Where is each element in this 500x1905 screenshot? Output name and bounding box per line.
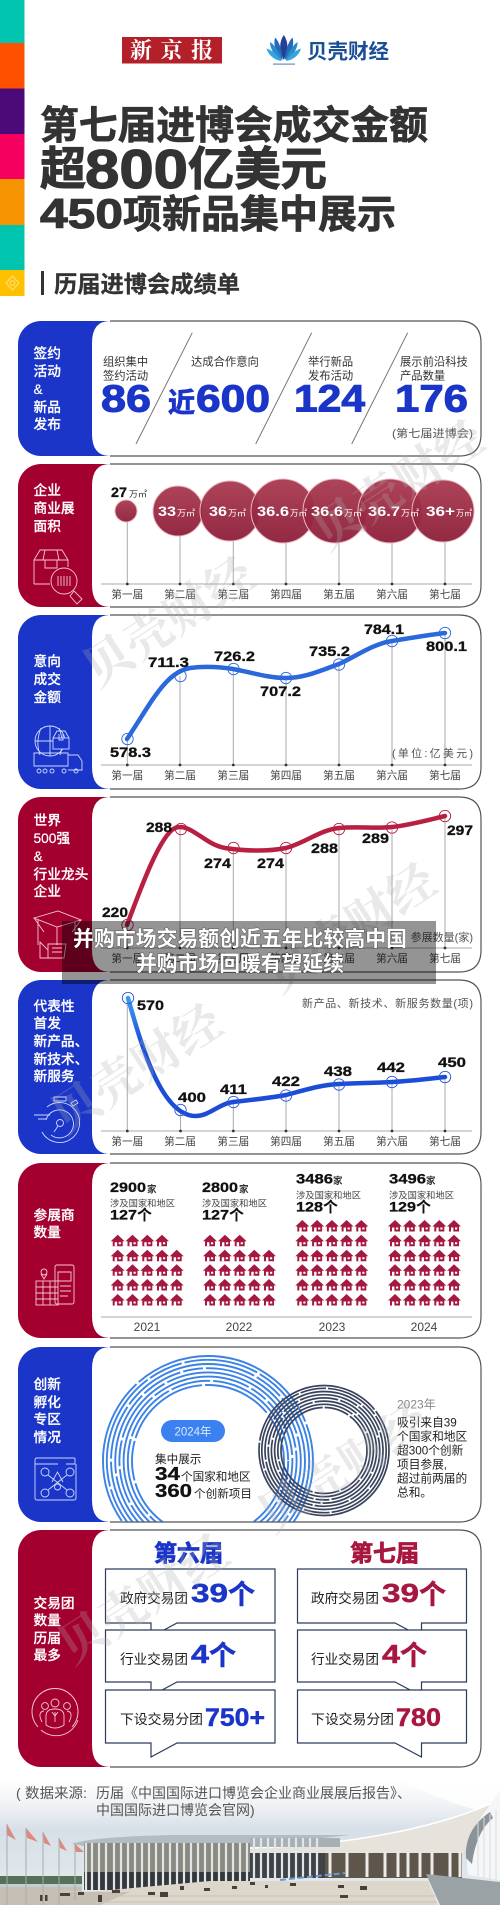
panel: intended turnover: 意向 bbox=[34, 653, 61, 669]
panel: signing activities: (第七届进博会) bbox=[392, 426, 473, 440]
line chart: fortune 500: 288 bbox=[311, 840, 338, 856]
line chart: turnover bbox=[101, 621, 473, 782]
callout: 2023 bbox=[397, 1398, 467, 1500]
icon: network window bbox=[35, 1458, 76, 1500]
exhibitor group: 2023: 2023 bbox=[319, 1320, 346, 1334]
watermark 4: 贝壳财经 bbox=[35, 983, 235, 1147]
area bubbles: 万㎡ bbox=[456, 508, 472, 518]
line chart: new products: 422 bbox=[272, 1073, 300, 1089]
exhibitor group: 2021: 2021 bbox=[134, 1320, 161, 1334]
line chart: fortune 500: 第四届 bbox=[270, 952, 302, 965]
watermark 5: 贝壳财经 bbox=[242, 1382, 442, 1546]
callout: 2024: 集中展示 bbox=[155, 1452, 201, 1466]
watermark 3: 贝壳财经 bbox=[249, 842, 449, 1006]
exhibitor group: 2023: 3486 bbox=[296, 1170, 333, 1186]
panel: exhibition area bbox=[18, 464, 481, 607]
line chart: turnover: 第二届 bbox=[164, 769, 196, 782]
panel: new products: 首发 bbox=[34, 1015, 61, 1031]
title: 450 bbox=[40, 190, 123, 237]
exhibitor group: 2021: 涉及国家和地区 bbox=[110, 1198, 175, 1208]
panel: signing activities: 展示前沿科技 bbox=[400, 354, 468, 368]
logo: 新京报: 新京报 bbox=[130, 34, 213, 65]
exhibitor group: 2022: 个 bbox=[229, 1207, 244, 1224]
callout: 2023: 超300个创新 bbox=[397, 1444, 464, 1458]
area bubbles: 万㎡ bbox=[344, 508, 363, 518]
callout: 2024: 360 bbox=[155, 1481, 192, 1501]
title: 亿美元 bbox=[188, 143, 327, 195]
panel: new products: 新技术、 bbox=[34, 1051, 88, 1067]
exhibitor group: 2021: 2900 bbox=[110, 1179, 146, 1195]
heading: seventh: 第七届 bbox=[350, 1540, 419, 1566]
line chart: fortune 500: 第七届 bbox=[429, 952, 461, 965]
logo: 贝壳财经: 贝壳财经 bbox=[307, 40, 389, 63]
exhibitor group: 2023: 涉及国家和地区 bbox=[296, 1190, 361, 1200]
line chart: new products: 442 bbox=[377, 1059, 405, 1075]
exhibitor group: 2023: 家 bbox=[333, 1175, 343, 1187]
callout: 2023: 总和。 bbox=[397, 1486, 432, 1500]
exhibitor group: 2022: 涉及国家和地区 bbox=[202, 1198, 267, 1208]
exhibitor group: 2023: 个 bbox=[323, 1199, 338, 1216]
callout: 2023: 吸引来自39 bbox=[397, 1416, 457, 1430]
watermark 2: 贝壳财经 bbox=[297, 399, 497, 563]
section heading: 历届进博会成绩单 bbox=[54, 271, 240, 297]
exhibitor group: 2024: 2024 bbox=[411, 1320, 438, 1334]
callouts: seventh expo bbox=[298, 1569, 466, 1757]
area bubbles: 36 bbox=[209, 503, 227, 519]
line chart: fortune 500: 第一届 bbox=[111, 952, 143, 965]
panel: signing activities: 签约 bbox=[34, 345, 61, 361]
title: 800 bbox=[85, 138, 188, 200]
exhibitor group: 2024: 家 bbox=[426, 1175, 436, 1187]
area bubbles: 万㎡ bbox=[129, 489, 148, 499]
panel: signing activities: 发布活动 bbox=[308, 368, 353, 382]
area bubbles: 36+ bbox=[426, 503, 455, 519]
area bubbles: 万㎡ bbox=[401, 508, 420, 518]
area bubbles bbox=[111, 479, 474, 584]
panel: trade delegations: 交易团 bbox=[34, 1595, 75, 1611]
panel: exhibitors: 参展商 bbox=[34, 1207, 75, 1223]
callouts: sixth expo: 个 bbox=[228, 1580, 255, 1610]
source note: 历届《中国国际进口博览会企业商业展展后报告》、 bbox=[96, 1785, 411, 1801]
exhibitor group: 2024: 3496 bbox=[389, 1170, 426, 1186]
line chart: fortune 500 bbox=[101, 810, 473, 965]
axis bbox=[101, 583, 472, 601]
panel: trade delegations: 数量 bbox=[34, 1613, 61, 1628]
panel: exhibitors bbox=[18, 1163, 481, 1338]
icon: box and thumb bbox=[34, 911, 81, 958]
panel: innovation zone: 专区 bbox=[34, 1412, 61, 1427]
panel: fortune 500: 500强 bbox=[34, 831, 70, 846]
axis: 第五届 bbox=[323, 588, 355, 601]
panel: trade delegations: 历届 bbox=[34, 1631, 61, 1646]
line chart: fortune 500: 第六届 bbox=[376, 952, 408, 965]
source note bbox=[16, 1785, 411, 1818]
source note: 中国国际进口博览会官网) bbox=[96, 1802, 255, 1818]
line chart: turnover: 784.1 bbox=[364, 621, 404, 637]
icon: people in circle bbox=[32, 1689, 78, 1736]
axis: 第一届 bbox=[111, 588, 143, 601]
line chart: new products: 第四届 bbox=[270, 1135, 302, 1148]
line chart: new products: 438 bbox=[324, 1063, 352, 1079]
panel: intended turnover: 成交 bbox=[34, 671, 61, 687]
line chart: turnover: (单位:亿美元) bbox=[392, 746, 473, 760]
callouts: sixth expo: 4 bbox=[191, 1639, 210, 1669]
callout: 2024: 个国家和地区 bbox=[181, 1470, 251, 1484]
chart: dark ring 2023 bbox=[259, 1386, 389, 1516]
callouts: seventh expo: 780 bbox=[396, 1704, 441, 1732]
callout: 2024: 个创新项目 bbox=[194, 1486, 252, 1500]
callout: 2023: 项目参展, bbox=[397, 1458, 447, 1472]
panel: signing activities: 产品数量 bbox=[400, 368, 445, 382]
area bubbles: 万㎡ bbox=[177, 508, 196, 518]
line chart: new products: 第二届 bbox=[164, 1135, 196, 1148]
panel: signing activities: 600 bbox=[196, 378, 270, 420]
panel: new products bbox=[18, 980, 481, 1154]
exhibitor group: 2021: 127 bbox=[110, 1206, 137, 1222]
callout: 2023: 2023年 bbox=[397, 1398, 436, 1412]
line chart: fortune 500: 第三届 bbox=[217, 952, 249, 965]
panel: exhibition area: 商业展 bbox=[34, 501, 75, 516]
axis: 第六届 bbox=[376, 588, 408, 601]
callouts: seventh expo: 下设交易分团 bbox=[311, 1711, 394, 1727]
callouts: seventh expo: 39 bbox=[382, 1578, 419, 1608]
callout: 2023: 超过前两届的 bbox=[397, 1472, 467, 1486]
area bubbles: 33 bbox=[158, 503, 176, 519]
line chart: fortune 500: 第二届 bbox=[164, 952, 196, 965]
source note: ( bbox=[16, 1785, 21, 1801]
panel: new products: 新产品、 bbox=[34, 1034, 88, 1049]
title: 第七届进博会成交金额 bbox=[40, 105, 428, 148]
area bubbles: 36.7 bbox=[368, 503, 400, 519]
panel: exhibition area: 面积 bbox=[34, 519, 61, 534]
banner overlay: 并购市场交易额创近五年比较高中国 bbox=[73, 927, 407, 951]
panel: signing activities: 近 bbox=[168, 388, 195, 418]
exhibitor group: 2022: 家 bbox=[239, 1184, 249, 1196]
line chart: turnover: 第五届 bbox=[323, 769, 355, 782]
line chart: new products: 411 bbox=[220, 1081, 247, 1097]
line chart: new products: 450 bbox=[438, 1054, 466, 1070]
line chart: turnover: 578.3 bbox=[110, 744, 151, 760]
axis: 第四届 bbox=[270, 588, 302, 601]
panel: signing activities: 124 bbox=[294, 378, 365, 420]
line chart: turnover: 第七届 bbox=[429, 769, 461, 782]
icon: stopwatch bbox=[34, 1097, 80, 1143]
panel: signing activities: & bbox=[34, 382, 43, 397]
axis: 第七届 bbox=[429, 588, 461, 601]
banner overlay bbox=[62, 921, 436, 984]
line chart: new products bbox=[101, 992, 473, 1148]
exhibitor group: 2021: 家 bbox=[147, 1184, 157, 1196]
line chart: new products: 第三届 bbox=[217, 1135, 249, 1148]
line chart: turnover: 第四届 bbox=[270, 769, 302, 782]
line chart: turnover: 第一届 bbox=[111, 769, 143, 782]
exhibitor group: 2022: 127 bbox=[202, 1206, 229, 1222]
watermark 6: 贝壳财经 bbox=[42, 1513, 242, 1677]
panel: innovation zone bbox=[18, 1346, 482, 1523]
panel: fortune 500: 世界 bbox=[34, 813, 61, 828]
callout: 2024: 2024年 bbox=[174, 1424, 212, 1438]
area bubbles: 万㎡ bbox=[228, 508, 247, 518]
panel: signing activities bbox=[18, 321, 481, 456]
area bubbles: 36.6 bbox=[311, 503, 343, 519]
area bubbles: 万㎡ bbox=[290, 508, 307, 518]
callouts: sixth expo: 政府交易团 bbox=[120, 1590, 188, 1606]
panel: signing activities: 活动 bbox=[34, 364, 61, 379]
panel: trade delegations: 最多 bbox=[34, 1647, 61, 1663]
line chart: fortune 500: 288 bbox=[146, 819, 172, 835]
left colour strip bbox=[0, 0, 24, 296]
line chart: fortune 500: 220 bbox=[102, 904, 128, 920]
panel: signing activities: 签约活动 bbox=[103, 368, 148, 382]
line chart: new products: 第七届 bbox=[429, 1135, 461, 1148]
exhibitor group: 2023 bbox=[295, 1170, 368, 1334]
callouts: sixth expo: 39 bbox=[191, 1578, 228, 1608]
area bubbles: 27 bbox=[111, 484, 127, 500]
exhibitor group: 2021: 个 bbox=[137, 1207, 152, 1224]
watermark 1: 贝壳财经 bbox=[67, 536, 267, 700]
callouts: sixth expo: 个 bbox=[209, 1641, 236, 1671]
panel: new products: 新服务 bbox=[34, 1069, 75, 1084]
line chart: turnover: 800.1 bbox=[426, 638, 467, 654]
line chart: fortune 500: 297 bbox=[447, 822, 473, 838]
source note: 数据来源: bbox=[25, 1785, 87, 1801]
panel: trade delegations bbox=[18, 1530, 481, 1767]
line chart: turnover: 707.2 bbox=[260, 683, 301, 699]
panel: innovation zone: 孵化 bbox=[34, 1395, 61, 1410]
panel: exhibition area: 企业 bbox=[34, 482, 61, 498]
exhibitor group: 2024 bbox=[388, 1170, 461, 1334]
line chart: turnover: 第六届 bbox=[376, 769, 408, 782]
logo: 贝壳财经 bbox=[266, 35, 389, 65]
panel: fortune 500: 行业龙头 bbox=[34, 867, 89, 882]
line chart: new products: 第六届 bbox=[376, 1135, 408, 1148]
exhibitor group: 2024: 129 bbox=[389, 1198, 416, 1214]
callouts: seventh expo: 个 bbox=[400, 1641, 427, 1671]
line chart: fortune 500: 第五届 bbox=[323, 952, 355, 965]
callouts: sixth expo: 行业交易团 bbox=[120, 1651, 188, 1667]
exhibitor group: 2022 bbox=[202, 1179, 276, 1334]
line chart: fortune 500: 289 bbox=[362, 830, 389, 846]
panel: intended turnover: 金额 bbox=[34, 689, 61, 705]
axis: 第三届 bbox=[217, 588, 249, 601]
panel: exhibitors: 数量 bbox=[34, 1225, 61, 1240]
callouts: sixth expo: 750+ bbox=[205, 1704, 265, 1732]
panel: signing activities: 达成合作意向 bbox=[191, 354, 259, 368]
line chart: fortune 500: 274 bbox=[257, 855, 284, 871]
exhibitor group: 2024: 个 bbox=[416, 1199, 431, 1216]
callout: 2023: 个国家和地区 bbox=[397, 1430, 467, 1444]
title: 项新品集中展示 bbox=[123, 194, 396, 237]
callouts: sixth expo: 下设交易分团 bbox=[120, 1711, 203, 1727]
icon: box and magnifier bbox=[34, 550, 82, 604]
exhibitor group: 2024: 涉及国家和地区 bbox=[389, 1190, 454, 1200]
line chart: new products: 570 bbox=[137, 997, 164, 1013]
panel: innovation zone: 情况 bbox=[34, 1430, 61, 1445]
callout: 2024 bbox=[155, 1420, 252, 1501]
exhibitor group: 2022: 2800 bbox=[202, 1179, 238, 1195]
callouts: seventh expo: 4 bbox=[382, 1639, 401, 1669]
icon: globe and truck bbox=[34, 726, 82, 773]
callout: 2024: 34 bbox=[155, 1464, 180, 1484]
line chart: fortune 500: 参展数量(家) bbox=[411, 930, 473, 944]
panel: innovation zone: 创新 bbox=[34, 1377, 61, 1392]
photo: expo building bbox=[0, 1780, 500, 1905]
panel: new products: 代表性 bbox=[34, 998, 75, 1014]
area bubbles: 36.6 bbox=[257, 503, 289, 519]
heading: sixth: 第六届 bbox=[154, 1540, 223, 1566]
panel: signing activities: 发布 bbox=[34, 416, 61, 432]
panel: signing activities: 176 bbox=[395, 378, 468, 420]
callouts: sixth expo bbox=[106, 1569, 275, 1757]
line chart: new products: 新产品、新技术、新服务数量(项) bbox=[302, 996, 473, 1010]
callouts: seventh expo: 个 bbox=[419, 1580, 446, 1610]
panel: fortune 500: 企业 bbox=[34, 883, 61, 899]
axis: 第二届 bbox=[164, 588, 196, 601]
icon: building and phone bbox=[36, 1265, 74, 1305]
panel: signing activities: 举行新品 bbox=[308, 354, 353, 368]
banner overlay: 并购市场回暖有望延续 bbox=[136, 952, 344, 976]
line chart: new products: 第五届 bbox=[323, 1135, 355, 1148]
line chart: turnover: 711.3 bbox=[148, 654, 189, 670]
line chart: new products: 400 bbox=[178, 1089, 206, 1105]
exhibitor group: 2022: 2022 bbox=[226, 1320, 253, 1334]
callouts: seventh expo: 行业交易团 bbox=[311, 1651, 379, 1667]
line chart: turnover: 735.2 bbox=[309, 643, 350, 659]
panel: intended turnover bbox=[18, 615, 481, 789]
panel: signing activities: 86 bbox=[101, 378, 151, 420]
panel: fortune 500 bbox=[18, 797, 481, 972]
line chart: fortune 500: 274 bbox=[204, 855, 231, 871]
title bbox=[40, 105, 428, 237]
title: 超 bbox=[40, 143, 86, 195]
line chart: new products: 第一届 bbox=[111, 1135, 143, 1148]
line chart: turnover: 第三届 bbox=[217, 769, 249, 782]
chart: blue ring 2024 bbox=[102, 1355, 314, 1522]
panel: signing activities: 组织集中 bbox=[103, 354, 148, 368]
exhibitor group: 2021 bbox=[110, 1179, 184, 1334]
line chart: turnover: 726.2 bbox=[214, 648, 255, 664]
panel: signing activities: 新品 bbox=[34, 400, 61, 415]
exhibitor group: 2023: 128 bbox=[296, 1198, 323, 1214]
callouts: seventh expo: 政府交易团 bbox=[311, 1590, 379, 1606]
panel: fortune 500: & bbox=[34, 849, 43, 864]
